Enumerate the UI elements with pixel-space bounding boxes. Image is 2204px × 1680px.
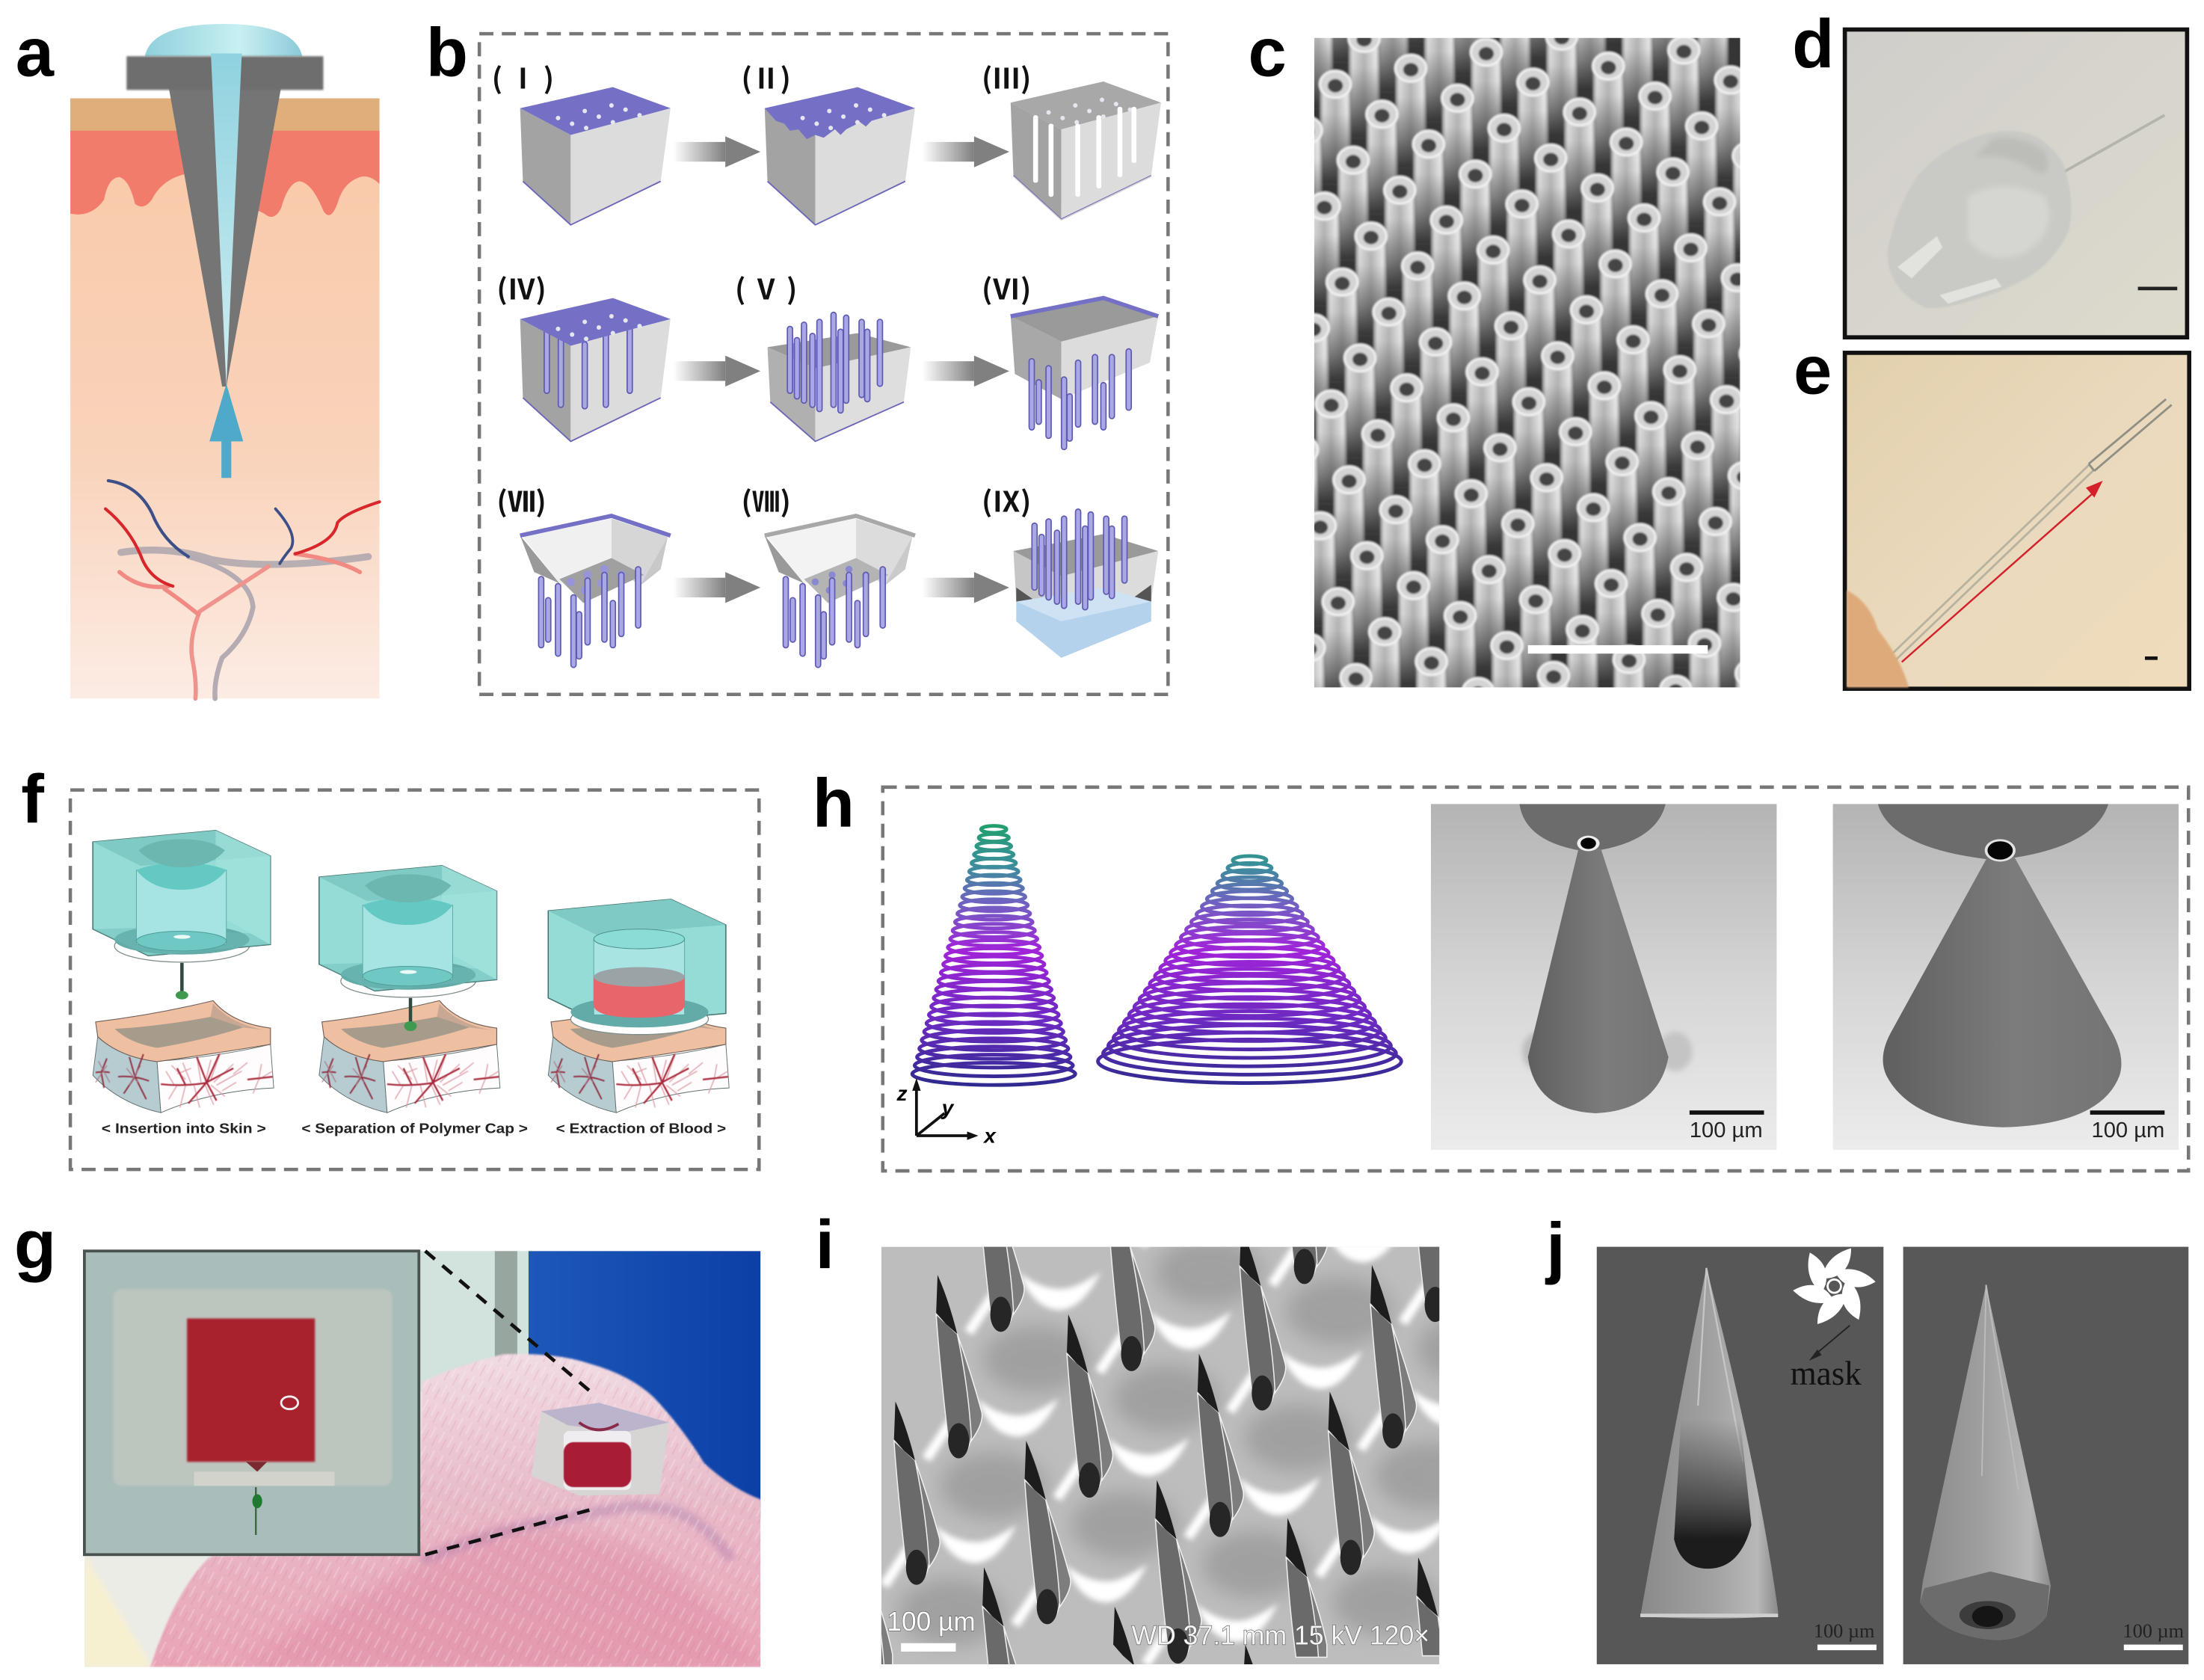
needle bbox=[126, 24, 323, 387]
inset photo bbox=[84, 1251, 419, 1554]
SEM with hollow base bbox=[1903, 1247, 2188, 1664]
needle array bbox=[881, 1247, 1440, 1664]
SEM with mask: 100 µm bbox=[1814, 1620, 1875, 1642]
needle tube bbox=[1882, 399, 2172, 666]
mask arrow bbox=[1809, 1326, 1850, 1361]
step 3: extraction bbox=[548, 899, 729, 1113]
vessels bbox=[105, 481, 380, 698]
label i: i bbox=[815, 1206, 834, 1283]
label j: j bbox=[1545, 1209, 1566, 1286]
process arrows bbox=[674, 136, 1009, 603]
step 1: insertion bbox=[93, 831, 274, 1113]
label h: h bbox=[813, 764, 855, 841]
step labels bbox=[492, 55, 1031, 520]
panel i: microneedle array SEM bbox=[819, 1219, 1440, 1664]
scene bbox=[84, 1251, 762, 1667]
label a: a bbox=[16, 14, 55, 91]
axes: y bbox=[941, 1095, 955, 1119]
step labels: (Ⅷ) bbox=[742, 479, 791, 520]
step 2: separation bbox=[319, 866, 500, 1113]
panel b: fabrication steps bbox=[426, 14, 1168, 695]
step IV bbox=[520, 298, 671, 441]
panel f: blood extraction schematic bbox=[21, 760, 759, 1169]
label e: e bbox=[1794, 331, 1832, 408]
step labels: (Ⅸ) bbox=[982, 479, 1031, 520]
label b: b bbox=[426, 14, 468, 91]
panel a: microneedle in skin bbox=[16, 14, 380, 698]
step labels: (Ⅱ) bbox=[742, 55, 791, 96]
captions: < Separation of Polymer Cap > bbox=[301, 1120, 528, 1136]
scale bar bbox=[2138, 287, 2177, 290]
step labels: (Ⅶ) bbox=[497, 479, 547, 520]
step labels: ( Ⅰ ) bbox=[492, 55, 554, 96]
scale and metadata: 100 µm bbox=[887, 1607, 976, 1637]
step VII bbox=[520, 516, 671, 665]
step labels: (Ⅵ) bbox=[982, 266, 1031, 307]
scale and metadata: WD 37.1 mm 15 kV 120× bbox=[1131, 1621, 1429, 1651]
photo bbox=[1845, 353, 2189, 689]
label g: g bbox=[14, 1206, 56, 1283]
step labels: ( Ⅴ ) bbox=[735, 266, 797, 307]
arrow bbox=[209, 384, 243, 478]
step labels: (Ⅲ) bbox=[982, 55, 1031, 96]
axes: z bbox=[896, 1081, 908, 1105]
SEM wide cone bbox=[1833, 804, 2179, 1150]
panel g: photo on rabbit bbox=[14, 1206, 762, 1667]
scale and metadata bbox=[887, 1607, 1429, 1652]
captions bbox=[102, 1120, 726, 1136]
SEM narrow cone bbox=[1431, 804, 1776, 1150]
panel j: single needle SEMs bbox=[1545, 1209, 2188, 1664]
device on skin bbox=[532, 1403, 669, 1495]
step I bbox=[520, 87, 671, 225]
finger bbox=[1847, 591, 1909, 687]
captions: < Extraction of Blood > bbox=[556, 1120, 726, 1136]
step V bbox=[768, 315, 911, 441]
photo bbox=[1845, 29, 2187, 337]
axes: x bbox=[982, 1123, 997, 1147]
label c: c bbox=[1249, 14, 1287, 91]
mask text: mask bbox=[1791, 1355, 1862, 1392]
SEM with mask bbox=[1597, 1247, 1883, 1664]
SEM wide cone: 100 µm bbox=[2092, 1119, 2164, 1142]
panel h: coil paths and cone SEMs bbox=[813, 764, 2188, 1171]
captions: < Insertion into Skin > bbox=[102, 1120, 266, 1136]
mask pinwheel bbox=[1793, 1248, 1876, 1324]
panel c: hollow pillar array SEM bbox=[425, 0, 2204, 943]
SEM with hollow base: 100 µm bbox=[2123, 1620, 2185, 1642]
pillar array bbox=[1314, 37, 1740, 688]
red arrow bbox=[1902, 481, 2103, 662]
step VIII bbox=[765, 516, 915, 665]
label f: f bbox=[21, 760, 44, 837]
step III bbox=[1011, 81, 1161, 221]
step VI bbox=[1011, 298, 1158, 447]
scale bar bbox=[1528, 645, 1708, 653]
narrow coil bbox=[912, 826, 1075, 1085]
zoom lines bbox=[425, 1251, 596, 1554]
wide coil bbox=[1098, 856, 1401, 1083]
step labels: (Ⅳ) bbox=[497, 266, 547, 307]
dashed frame bbox=[883, 787, 2188, 1171]
dashed frame bbox=[70, 790, 759, 1169]
label d: d bbox=[1792, 5, 1834, 82]
dashed frame bbox=[479, 34, 1168, 695]
SEM narrow cone: 100 µm bbox=[1690, 1119, 1763, 1142]
step IX bbox=[1014, 511, 1158, 658]
step II bbox=[765, 87, 915, 225]
cap and needle bbox=[1888, 115, 2164, 308]
panel d: photo of needle device bbox=[1792, 5, 2187, 337]
axes bbox=[896, 1078, 997, 1147]
skin layers bbox=[70, 99, 380, 698]
scale bar bbox=[2145, 656, 2158, 660]
panel e: photo of long needle bbox=[1794, 331, 2189, 689]
